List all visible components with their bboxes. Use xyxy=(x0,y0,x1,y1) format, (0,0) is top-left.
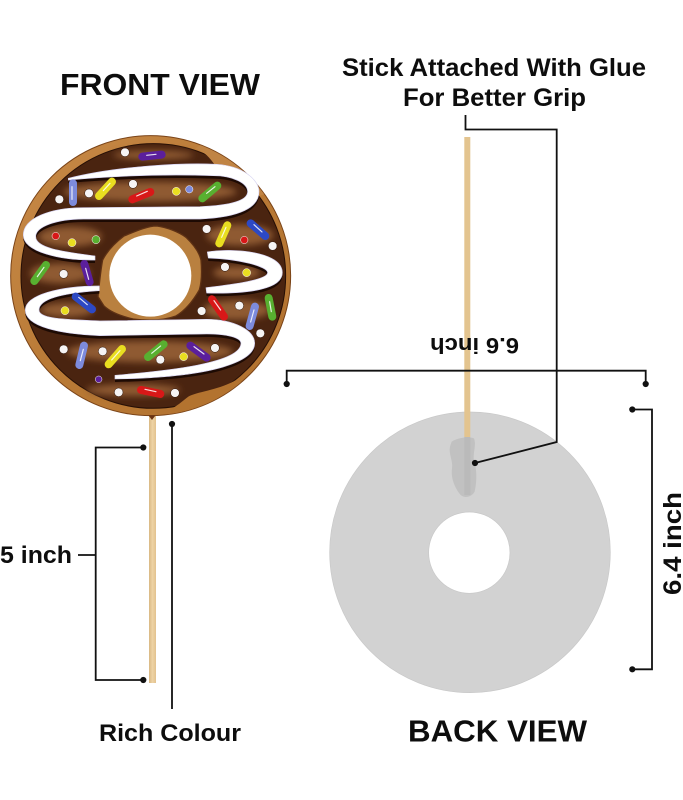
icing shadow xyxy=(23,167,282,382)
label: rich colour: Rich Colour xyxy=(99,720,241,747)
bracket: 6.6 inch width xyxy=(284,371,648,386)
white icing drizzle xyxy=(23,164,282,379)
sprinkle highlights xyxy=(37,154,271,392)
stick: back view xyxy=(464,137,470,437)
line: glue callout pointer xyxy=(466,115,557,465)
heading: back view: BACK VIEW xyxy=(408,714,588,748)
label: 6.6 inch upside down: 6.6 inch xyxy=(430,333,519,358)
stick tip xyxy=(148,415,156,420)
heading: front view: FRONT VIEW xyxy=(60,67,261,102)
glue patch xyxy=(450,437,476,497)
grey disc with hole xyxy=(330,412,610,693)
exposed dough patches xyxy=(172,145,264,414)
stick: front view xyxy=(149,416,156,683)
dough ring around hole xyxy=(98,226,201,320)
heading: better grip callout: For Better Grip xyxy=(403,84,586,112)
back view donut xyxy=(330,412,610,693)
sprinkle dots: white xyxy=(55,148,277,397)
sprinkle bars xyxy=(34,155,272,394)
chocolate glaze xyxy=(21,144,286,408)
bracket: 5 inch stick length xyxy=(78,445,146,682)
glue covering stick end xyxy=(464,437,470,495)
donut: front view xyxy=(11,136,291,420)
label: 5 inch: 5 inch xyxy=(0,542,72,569)
line: rich colour pointer xyxy=(170,422,174,709)
glaze highlights xyxy=(30,150,273,396)
sprinkle dots: coloured xyxy=(52,186,251,383)
donut hole xyxy=(109,235,191,317)
bracket: 6.4 inch height xyxy=(630,407,652,672)
dough outer shape xyxy=(11,136,291,416)
heading: stick attached callout: Stick Attached With Glue xyxy=(342,54,646,82)
